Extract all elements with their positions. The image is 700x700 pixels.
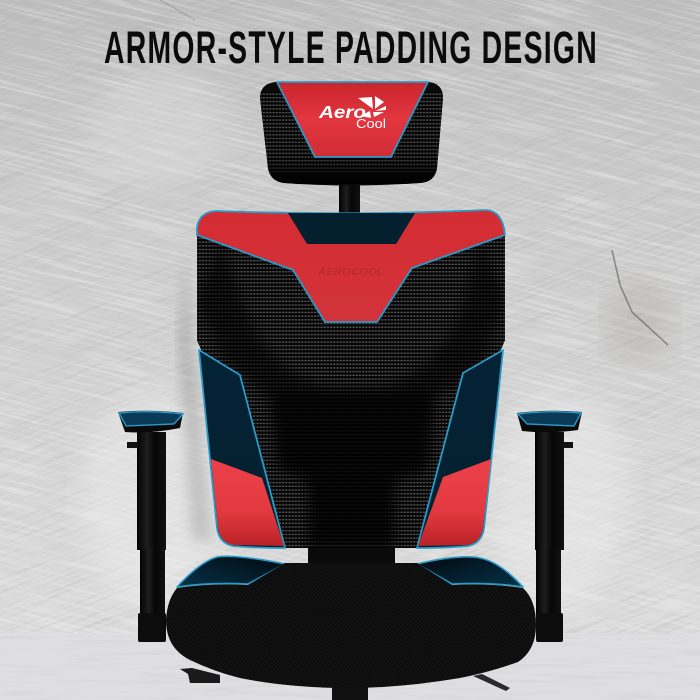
headrest (258, 82, 444, 186)
right seat wing (417, 557, 523, 587)
chair neck post (339, 183, 360, 215)
left seat wing (177, 556, 285, 587)
right side armor panel (417, 350, 503, 548)
under-seat mechanism (180, 668, 510, 700)
logo: AeroCool: Aero (318, 102, 366, 122)
left armrest (118, 411, 183, 642)
background: floor (0, 633, 700, 700)
embossed logo: AEROCOOL (317, 267, 384, 278)
seat cushion (166, 563, 536, 688)
navy inset (288, 213, 415, 244)
headrest red panel (277, 82, 428, 157)
backrest lower connector (308, 548, 395, 564)
logo: AeroCool (318, 96, 386, 131)
right armrest (517, 411, 582, 642)
chair shadow on wall (178, 250, 212, 540)
backrest top red armor panel (197, 210, 505, 322)
backrest mesh (197, 232, 505, 548)
logo: AeroCool: Cool (356, 117, 386, 131)
left side armor panel (199, 350, 285, 548)
